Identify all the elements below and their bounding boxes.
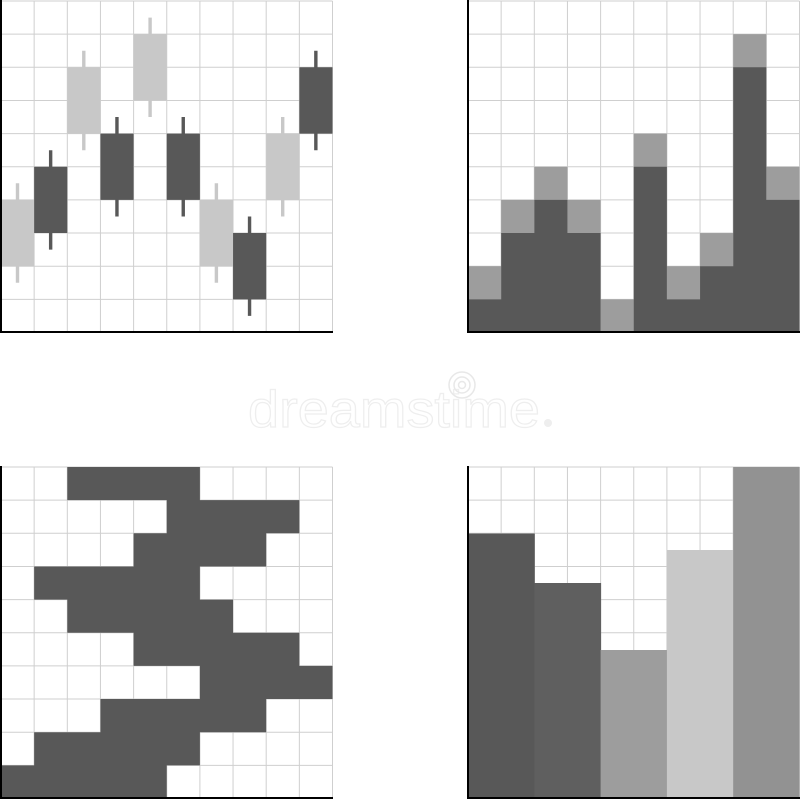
column 2: [534, 583, 601, 798]
column 3: [601, 650, 667, 798]
candle 9: [266, 117, 299, 217]
axes: [1, 0, 333, 332]
axes: [1, 466, 333, 798]
watermark dot: [544, 419, 552, 427]
candle 3: [67, 51, 100, 150]
candle 5: [134, 18, 167, 117]
panel: stacked column chart: [468, 0, 800, 332]
column 5: [733, 467, 800, 798]
column 1: [468, 534, 535, 798]
panel: horizontal floating bar chart: [0, 466, 333, 798]
axes: [468, 0, 800, 332]
candle 7: [200, 183, 233, 283]
upper stack segments: [468, 34, 800, 332]
candle 2: [34, 150, 67, 250]
axes: [468, 466, 800, 798]
watermark spiral logo: [449, 372, 475, 398]
candle 10: [299, 51, 332, 150]
column 4: [667, 550, 734, 798]
horizontal bars: [0, 467, 332, 798]
panel: column chart: [468, 466, 800, 798]
watermark: [248, 372, 552, 439]
candle 8: [233, 216, 266, 316]
watermark wordmark: dreamstime: [248, 381, 540, 439]
candle 4: [100, 117, 134, 217]
candle 1: [1, 183, 34, 283]
lower stack segments: [468, 67, 800, 332]
candle 6: [167, 117, 200, 217]
panel: candlestick chart: [1, 0, 333, 332]
